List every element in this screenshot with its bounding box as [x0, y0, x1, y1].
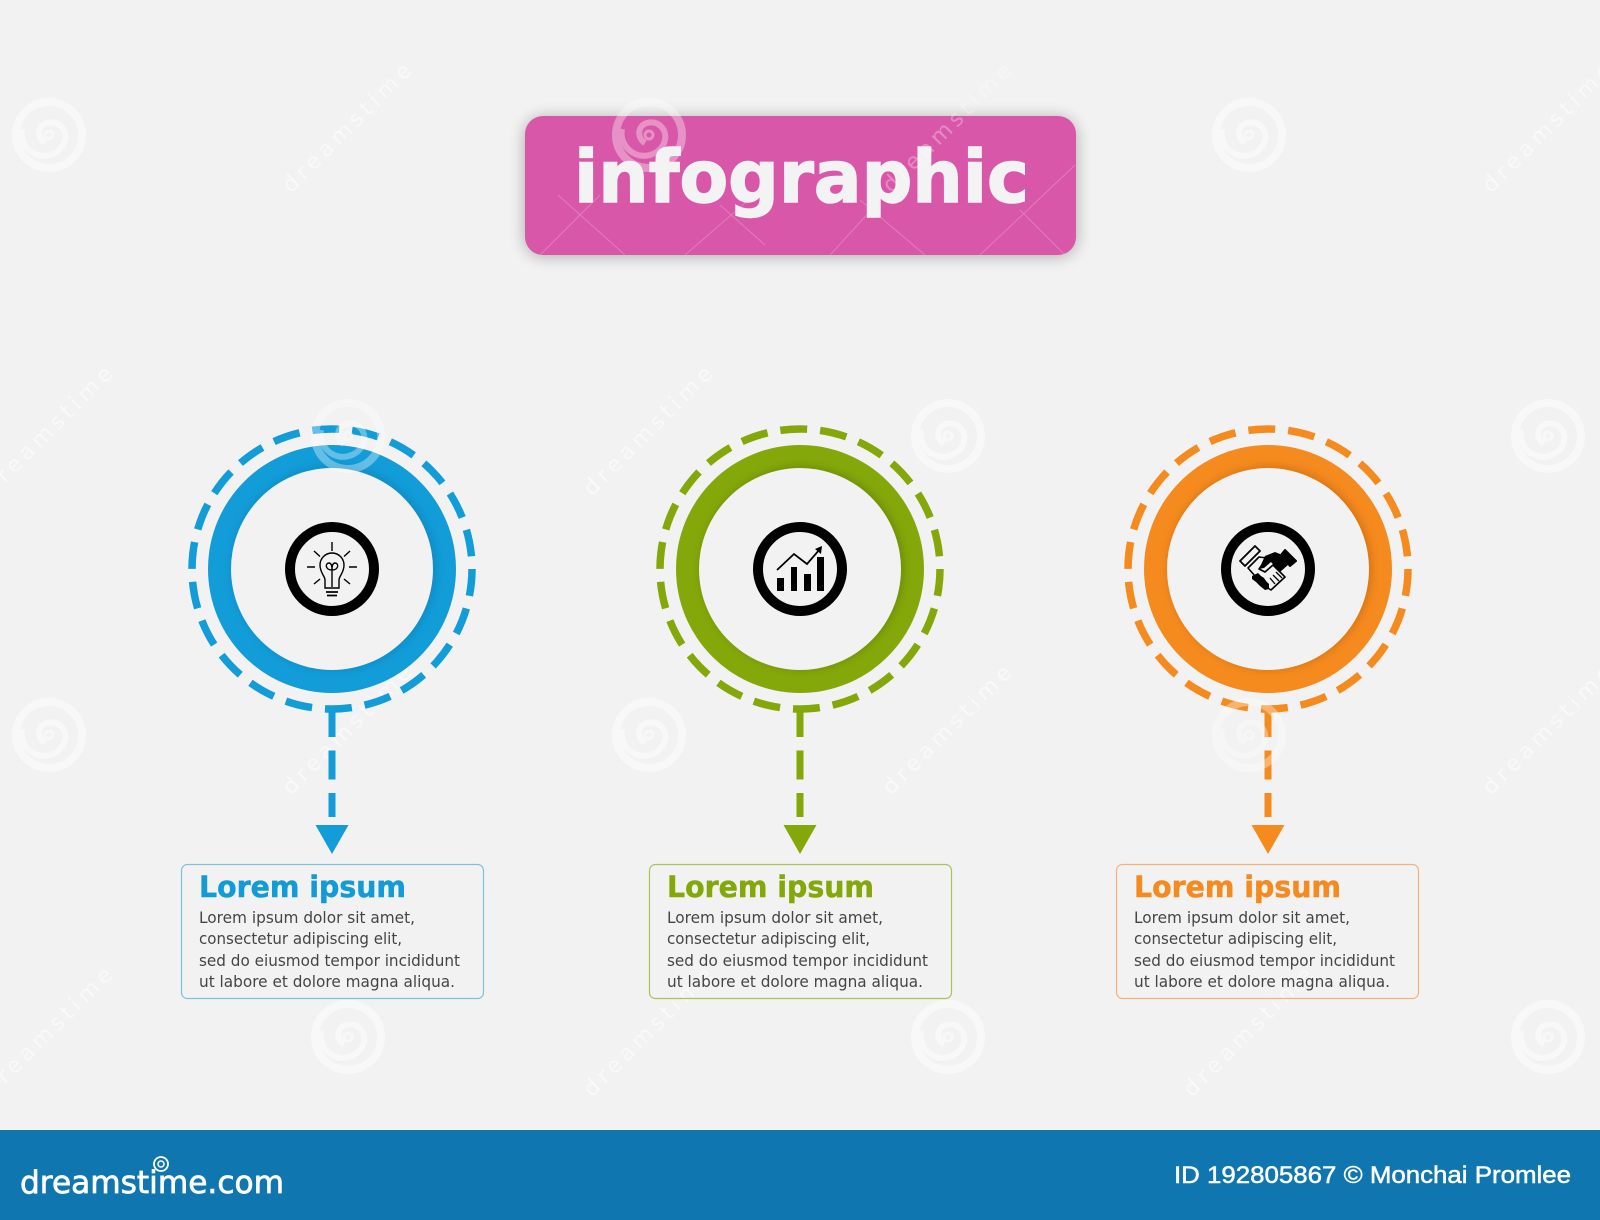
- solid ring green: [676, 445, 924, 693]
- body text green: Lorem ipsum dolor sit amet,: [667, 908, 883, 927]
- heading blue: Lorem ipsum: [199, 870, 406, 904]
- panel: green step: [650, 429, 952, 998]
- body text blue: Lorem ipsum dolor sit amet,: [199, 908, 415, 927]
- arrow green: [784, 708, 816, 854]
- solid ring blue: [208, 445, 456, 693]
- dashed ring orange: [1128, 429, 1408, 709]
- icon: bar chart: [758, 527, 842, 611]
- body text green: sed do eiusmod tempor incididunt: [667, 951, 928, 970]
- body text green: consectetur adipiscing elit,: [667, 929, 870, 948]
- watermark text: dreamstime: [579, 362, 718, 501]
- body text orange: sed do eiusmod tempor incididunt: [1134, 951, 1395, 970]
- body text blue: [199, 908, 460, 991]
- body text blue: ut labore et dolore magna aliqua.: [199, 972, 455, 991]
- watermark text: dreamstime: [1179, 963, 1318, 1102]
- title banner: [525, 59, 1076, 256]
- watermark text: dreamstime: [278, 59, 417, 198]
- text box blue: [182, 864, 484, 998]
- watermark text: dreamstime: [878, 661, 1017, 800]
- arrow orange: [1252, 708, 1284, 854]
- body text orange: consectetur adipiscing elit,: [1134, 929, 1337, 948]
- heading orange: Lorem ipsum: [1134, 870, 1341, 904]
- watermark spirals: [16, 102, 1581, 1070]
- body text orange: ut labore et dolore magna aliqua.: [1134, 972, 1390, 991]
- body text blue: sed do eiusmod tempor incididunt: [199, 951, 460, 970]
- title banner: dreamstime: [878, 59, 1017, 198]
- dashed ring green: [660, 429, 940, 709]
- icon: light bulb: [290, 527, 374, 611]
- footer bar: [0, 1130, 1600, 1220]
- arrow blue: [316, 708, 348, 854]
- text box orange: [1116, 864, 1418, 998]
- footer credit: ID 192805867 © Monchai Promlee: [1174, 1162, 1571, 1189]
- text box green: [650, 864, 952, 998]
- watermark text: dreamstime: [579, 963, 718, 1102]
- watermark text: dreamstime: [278, 661, 417, 800]
- heading green: Lorem ipsum: [667, 870, 874, 904]
- body text green: [667, 908, 928, 991]
- body text orange: [1134, 908, 1395, 991]
- footer logo: dreamstime.com: [20, 1165, 284, 1201]
- panel: blue step: [182, 429, 484, 998]
- body text blue: consectetur adipiscing elit,: [199, 929, 402, 948]
- icon: handshake: [1226, 527, 1310, 611]
- watermark overlays on rings: [315, 403, 1282, 768]
- dashed ring blue: [192, 429, 472, 709]
- body text green: ut labore et dolore magna aliqua.: [667, 972, 923, 991]
- title banner: infographic: [574, 135, 1029, 219]
- panel: orange step: [1116, 429, 1418, 998]
- solid ring orange: [1144, 445, 1392, 693]
- body text orange: Lorem ipsum dolor sit amet,: [1134, 908, 1350, 927]
